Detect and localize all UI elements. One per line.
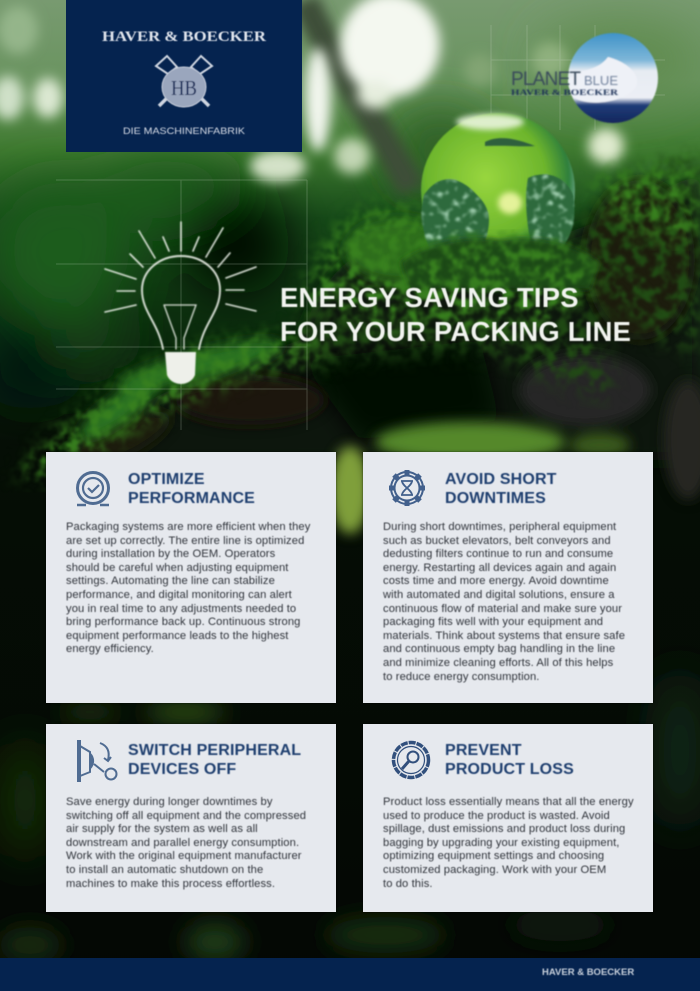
planet blue wordmark: HAVER & BOECKER [511, 87, 619, 97]
body text: to do this. [383, 878, 433, 890]
footer bar: HAVER & BOECKER [542, 967, 634, 978]
green glass globe [421, 113, 575, 267]
ridge dark base [40, 170, 700, 470]
body text: During short downtimes, peripheral equipment [383, 521, 616, 533]
body text [382, 521, 626, 684]
panel: switch peripheral devices off [46, 724, 336, 912]
title: ENERGY SAVING TIPS [280, 282, 579, 313]
tree branch [305, 0, 412, 190]
moss in front of globe [400, 236, 600, 300]
body text: Packaging systems are more efficient when they [66, 521, 310, 533]
body text: are set up correctly. The entire line is optimized [66, 535, 304, 547]
heading [445, 742, 574, 778]
body text: settings. Automating the line can stabilize [66, 575, 275, 587]
body text: materials. Think about systems that ensure safe [383, 630, 625, 642]
body text: spillage, dust emissions and product loss during [383, 823, 625, 835]
brand name and emblem: DIE MASCHINENFABRIK [123, 126, 246, 137]
body text: to reduce energy consumption. [383, 671, 540, 683]
body text: with automated and digital solutions, ensure a [383, 589, 615, 601]
title: FOR YOUR PACKING LINE [280, 316, 631, 347]
blueprint grid lines [56, 25, 665, 430]
panel: prevent product loss [363, 724, 653, 912]
body text: air supply for the system as well as all [66, 823, 258, 835]
heading: PREVENT [445, 742, 522, 759]
panel: avoid short downtimes [363, 452, 653, 703]
body text: optimizing equipment settings and choosing [383, 850, 604, 862]
heading: DEVICES OFF [128, 760, 236, 778]
bokeh lights [0, 0, 624, 182]
body text: bagging by upgrading your existing equipment, [383, 837, 620, 849]
body text [382, 796, 634, 890]
body text: energy efficiency. [66, 643, 154, 655]
icon: circular gauge with drop [392, 740, 430, 780]
body text: used to produce the product is wasted. Avoid [383, 810, 610, 822]
icon: gauge with check mark [76, 471, 110, 506]
brand name and emblem [102, 29, 267, 137]
icon: gear with hourglass [389, 470, 425, 506]
heading: OPTIMIZE [128, 471, 205, 488]
planet blue wordmark: PLANET [511, 69, 581, 90]
Planet Blue logo [510, 32, 659, 124]
body text: bring performance back up. Continuous strong [66, 616, 300, 628]
body text: and minimize cleaning efforts. All of this helps [383, 657, 613, 669]
body text: Work with the original equipment manufacturer [66, 850, 302, 862]
body text: costs time and more energy. Avoid downtime [383, 575, 609, 587]
brand name and emblem: HB [171, 76, 197, 100]
heading: AVOID SHORT [445, 471, 557, 488]
body text: machines to make this process effortless. [66, 878, 275, 890]
planet blue wordmark: BLUE [584, 73, 618, 88]
body text [66, 521, 311, 656]
body text: downstream and parallel energy consumption. [66, 837, 299, 849]
body text: energy. Restarting all devices again and again [383, 562, 616, 574]
body text: customized packaging. Work with your OEM [383, 864, 606, 876]
planet blue wordmark [511, 69, 619, 97]
body text: switching off all equipment and the compressed [66, 810, 306, 822]
body text: Product loss essentially means that all the energy [383, 796, 634, 808]
brand name and emblem: HAVER & BOECKER [102, 29, 267, 45]
body text: you in real time to any adjustments needed to [66, 603, 296, 615]
lightbulb icon [105, 222, 256, 349]
body text: dedusting filters continue to run and consume [383, 548, 613, 560]
heading [128, 471, 255, 506]
lightbulb base [165, 352, 196, 384]
panel: optimize performance [46, 452, 336, 703]
icon: switch with device [77, 740, 118, 782]
body text: to install an automatic shutdown on the [66, 864, 263, 876]
heading: PERFORMANCE [128, 490, 255, 506]
planet blue globe [568, 33, 658, 123]
body text: should be careful when adjusting equipment [66, 562, 289, 574]
footer bar [0, 958, 700, 991]
body text: during installation by the OEM. Operators [66, 548, 275, 560]
moss texture [15, 334, 335, 478]
logo panel [66, 0, 302, 152]
heading [444, 471, 557, 506]
title [280, 282, 631, 347]
body text: continuous flow of material and make sure your [383, 603, 622, 615]
heading: PRODUCT LOSS [445, 760, 574, 778]
heading: SWITCH PERIPHERAL [128, 742, 301, 759]
heading: DOWNTIMES [445, 490, 546, 506]
body text: packaging fits well with your equipment and [383, 616, 603, 628]
body text: performance, and digital monitoring can alert [66, 589, 292, 601]
body text: and continuous empty bag handling in the line [383, 643, 615, 655]
body text [66, 796, 306, 890]
body text: equipment performance leads to the highest [66, 630, 288, 642]
body text: such as bucket elevators, belt conveyors and [383, 535, 611, 547]
body text: Save energy during longer downtimes by [66, 796, 273, 808]
heading [128, 742, 302, 778]
